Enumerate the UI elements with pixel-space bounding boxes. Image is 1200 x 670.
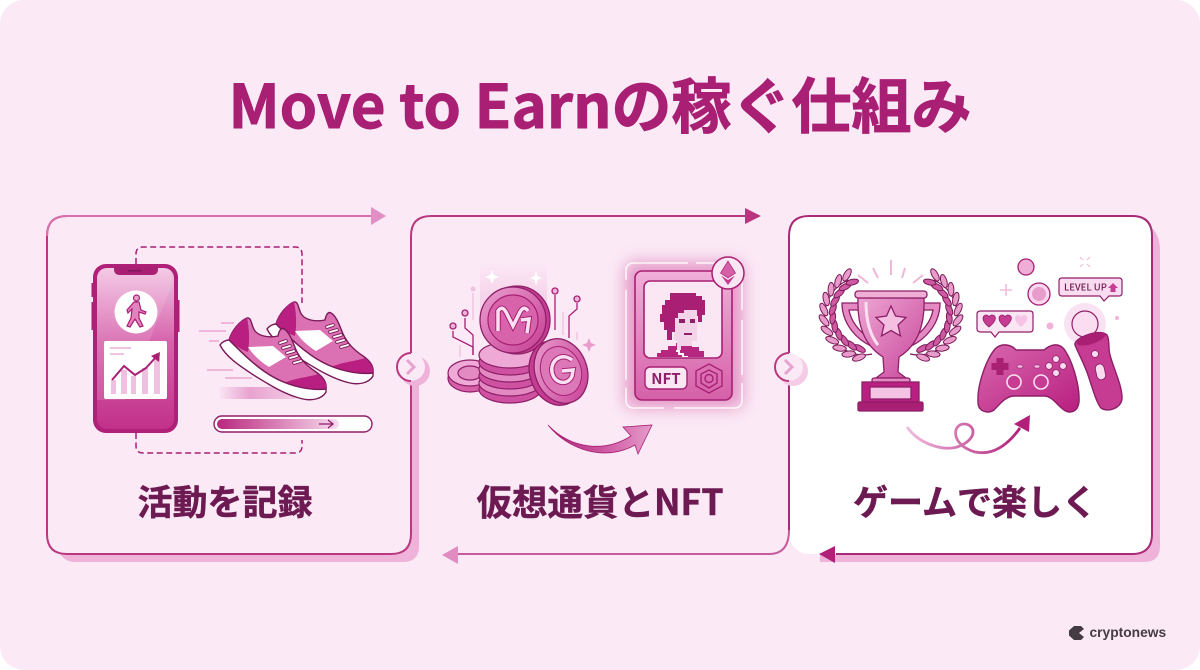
icon: running shoes	[220, 302, 373, 400]
panel 2 outline: crypto and NFT	[411, 208, 789, 554]
icon: walking person	[114, 290, 158, 334]
icon: laurel wreath left	[817, 266, 872, 363]
light beam behind coins	[480, 262, 547, 322]
hexagon emblem	[696, 364, 722, 393]
icon: game controller	[978, 345, 1079, 412]
trophy rays	[858, 260, 923, 283]
icon: G coin	[520, 331, 597, 413]
icon: NFT card	[625, 257, 744, 408]
panel 3 background: game	[789, 216, 1160, 562]
icon: coin stack	[448, 342, 541, 403]
arrow: top right of panel 1	[371, 207, 386, 225]
icon: laurel wreath right	[910, 266, 965, 363]
connector 2	[775, 353, 808, 386]
arrow: bottom left of panel 3	[819, 546, 835, 563]
speed lines and motion shadow	[199, 323, 295, 399]
arrow: top right of panel 2	[745, 208, 761, 224]
speech bubble: level up: LEVEL UP	[1064, 280, 1107, 294]
label: crypto and NFT: 仮想通貨とNFT	[476, 475, 724, 526]
icon: M coin	[480, 286, 550, 354]
title: Move to Earnの稼ぐ仕組み	[228, 59, 972, 146]
label: activity: 活動を記録	[137, 475, 313, 526]
ethereum badge	[712, 257, 744, 289]
icon: floating coins and plus	[1000, 257, 1119, 330]
speech bubble: level up	[1059, 278, 1122, 301]
dashed tracking path	[136, 247, 302, 453]
NFT badge	[645, 367, 687, 389]
icon: smartphone	[92, 264, 180, 433]
panel 1 outline: activity	[47, 207, 419, 562]
connector 1	[397, 353, 430, 386]
speech bubble: hearts	[977, 311, 1033, 337]
logo: cryptonews: cryptonews	[1090, 625, 1166, 640]
loop arrow	[907, 415, 1030, 453]
progress bar	[214, 416, 372, 432]
arrow: bottom left of panel 2	[442, 546, 458, 564]
NFT badge: NFT	[651, 368, 681, 389]
label: game: ゲームで楽しく	[853, 475, 1097, 526]
chart card	[104, 341, 167, 399]
sparkles	[485, 270, 596, 352]
curved arrow: coins to NFT	[548, 425, 652, 454]
icon: trophy	[842, 291, 940, 411]
icon: motion controller	[1064, 303, 1122, 410]
icon: circuit traces	[450, 286, 580, 357]
pixel portrait	[657, 293, 705, 357]
